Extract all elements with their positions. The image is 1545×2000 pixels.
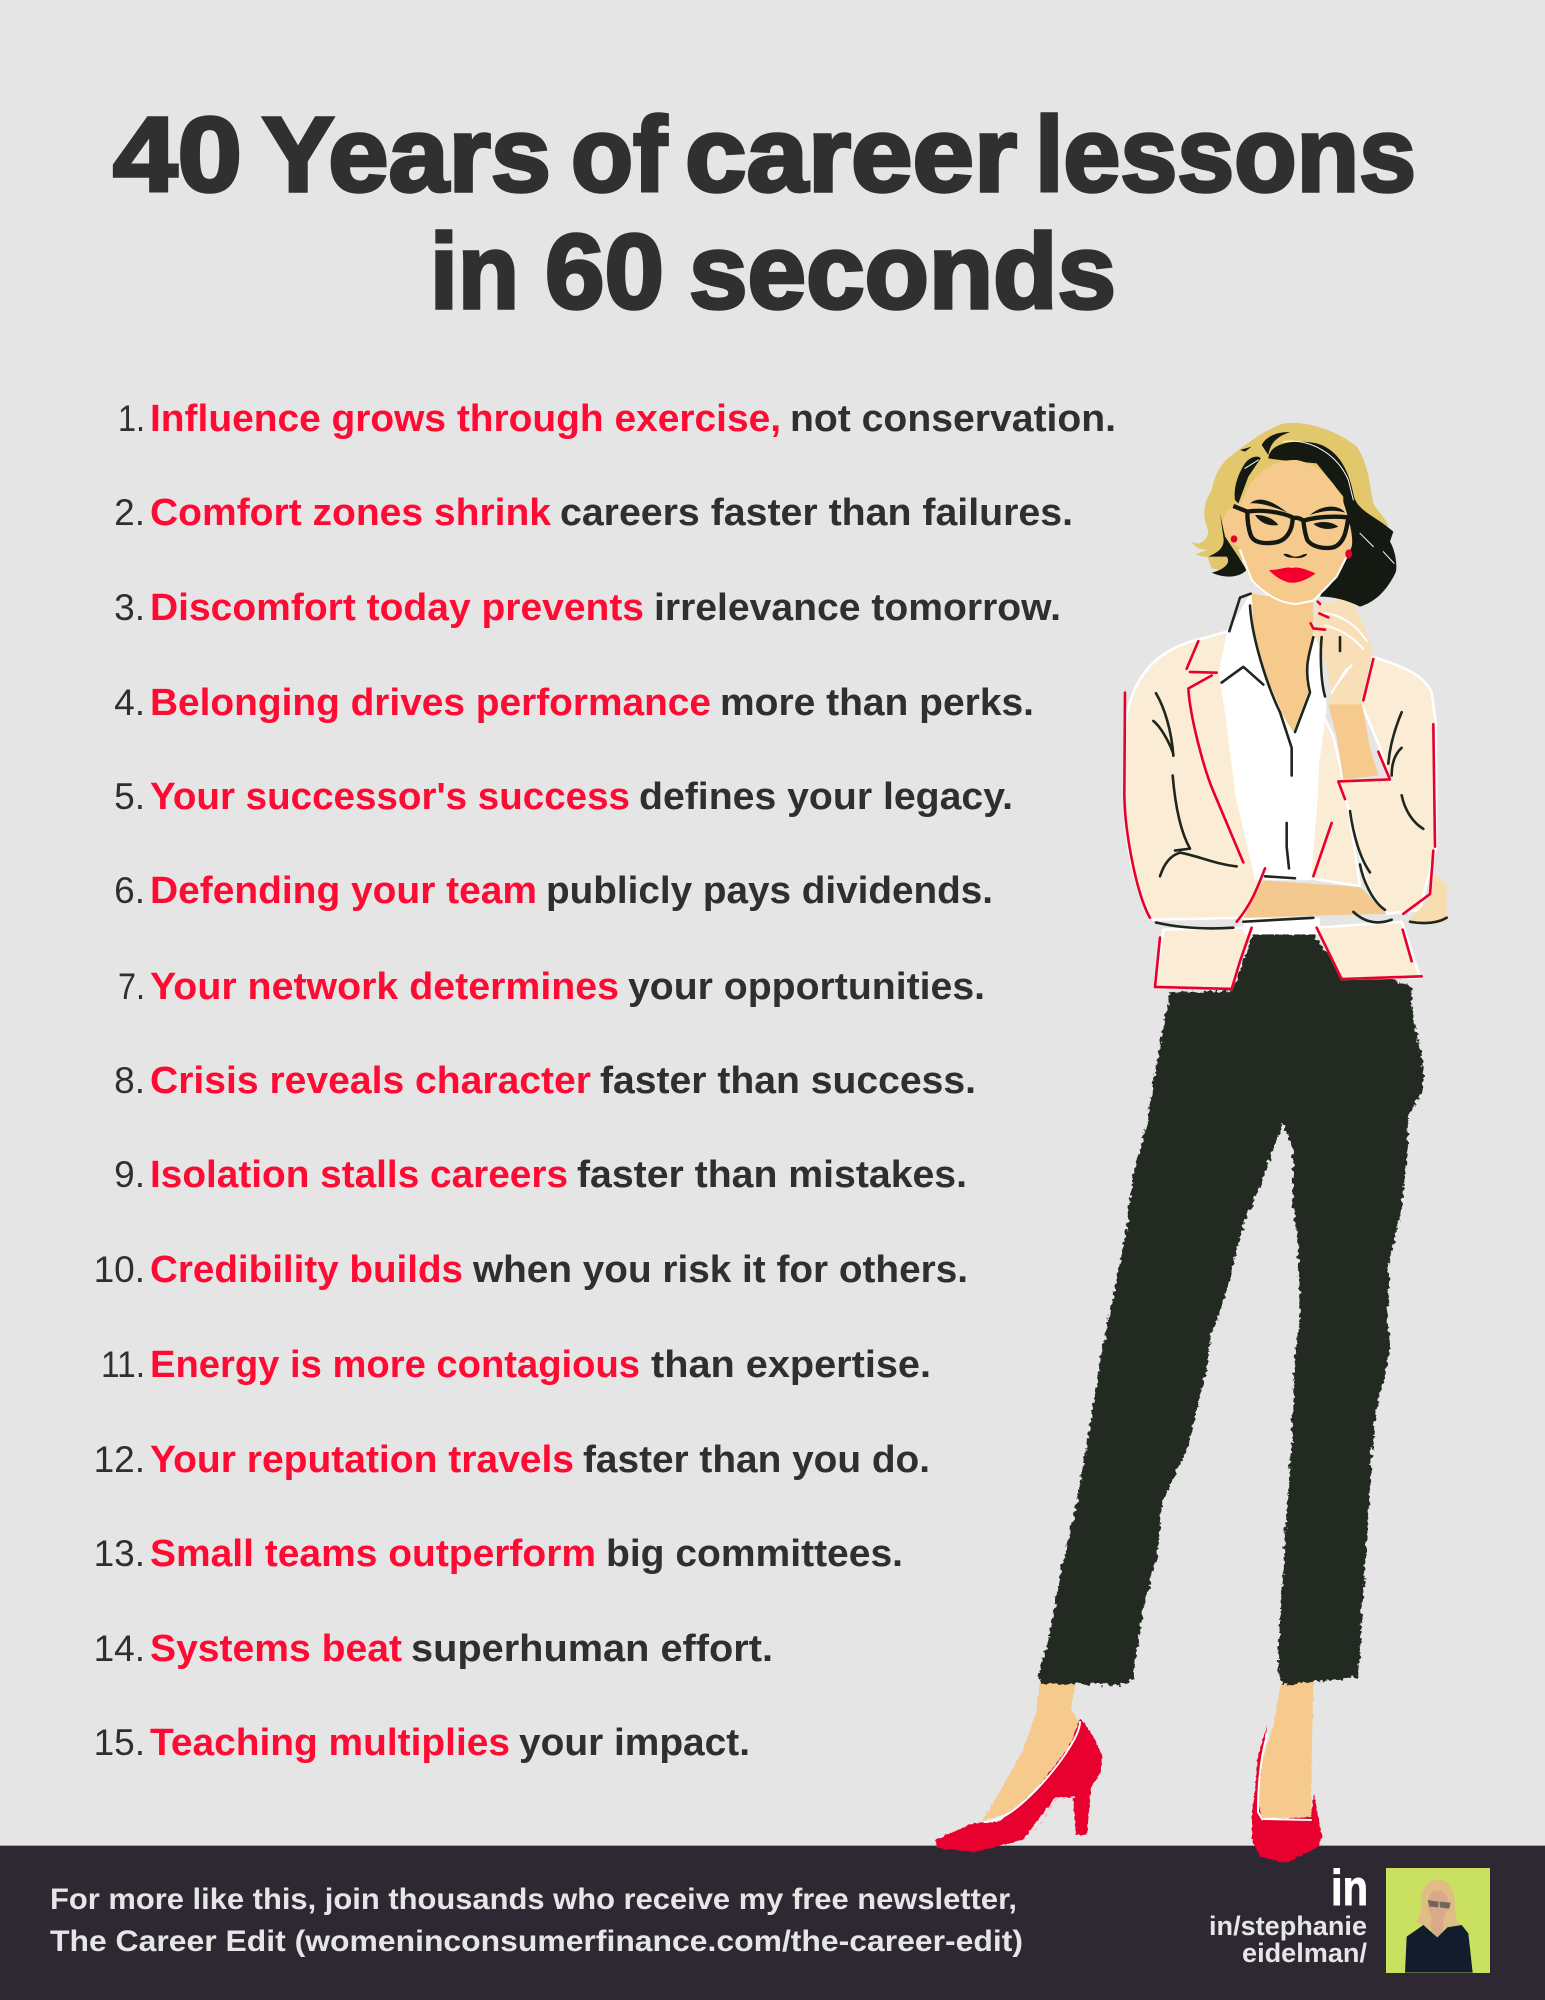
lesson 7: your opportunities.: [628, 966, 985, 1008]
lesson 10: when you risk it for others.: [472, 1249, 968, 1291]
lesson 4: Belonging drives performance: [150, 682, 711, 724]
footer band: [0, 1845, 1545, 2000]
lesson 9: [114, 1154, 967, 1196]
lesson 5: Your successor's success: [150, 776, 630, 818]
face outline: [1240, 550, 1347, 604]
LinkedIn handle: eidelman/: [1242, 1938, 1367, 1968]
lesson 11: [101, 1344, 931, 1386]
crossed forearm: [1243, 880, 1387, 918]
lesson 15: your impact.: [519, 1722, 750, 1764]
icon: LinkedIn "in" mark: in: [1331, 1860, 1368, 1916]
lesson 3: Discomfort today prevents: [150, 587, 644, 629]
lesson 8: [114, 1060, 976, 1102]
cream blazer: [1124, 631, 1436, 989]
title: career: [685, 96, 1017, 214]
title: of: [571, 96, 668, 214]
black trousers: [1038, 934, 1423, 1685]
lesson 6: 6.: [114, 870, 145, 911]
head with blonde and black hair, glasses, red lips: [1192, 423, 1396, 607]
lesson 13: 13.: [94, 1533, 145, 1574]
lesson 13: Small teams outperform: [150, 1533, 596, 1575]
footer newsletter text: For more like this, join thousands who receive my free newsletter,: [50, 1883, 1017, 1916]
title: lessons: [1035, 96, 1416, 214]
lesson 7: 7.: [118, 966, 145, 1007]
lesson 12: Your reputation travels: [150, 1439, 574, 1481]
lesson 4: more than perks.: [720, 682, 1034, 724]
lesson 12: [94, 1439, 930, 1481]
lesson 9: Isolation stalls careers: [150, 1154, 568, 1196]
lesson 2: Comfort zones shrink: [150, 492, 552, 534]
title: seconds: [689, 213, 1116, 331]
legs and feet: [982, 1680, 1314, 1821]
lesson 13: big committees.: [606, 1533, 903, 1575]
lesson 14: 14.: [94, 1628, 145, 1669]
lesson 10: [94, 1249, 968, 1291]
lesson 11: than expertise.: [651, 1344, 931, 1386]
eyebrows: [1250, 500, 1345, 515]
lesson 6: publicly pays dividends.: [546, 870, 993, 912]
neck skin: [1252, 594, 1313, 732]
lesson 9: faster than mistakes.: [577, 1154, 967, 1196]
nose: [1283, 554, 1307, 558]
far hand: [1408, 874, 1447, 922]
lesson 10: 10.: [94, 1249, 145, 1290]
lesson 10: Credibility builds: [150, 1249, 463, 1291]
red shoe, right: [1252, 1725, 1322, 1863]
lesson 1: Influence grows through exercise,: [150, 398, 781, 440]
lesson 14: [94, 1628, 773, 1670]
title: 40: [113, 96, 242, 214]
torso: jacket, shirt and arms: [1124, 583, 1447, 989]
lesson 4: [114, 682, 1034, 724]
footer newsletter text: [50, 1883, 1023, 1958]
lesson 2: [114, 492, 1073, 534]
lesson 11: Energy is more contagious: [150, 1344, 640, 1386]
lesson 5: [114, 776, 1013, 818]
raised forearm: [1328, 702, 1378, 779]
earrings: [1231, 535, 1352, 559]
lesson 9: 9.: [114, 1154, 145, 1195]
lesson 11: 11.: [101, 1344, 145, 1385]
illustration: businesswoman in glasses and red heels: [935, 423, 1447, 1863]
lesson 5: defines your legacy.: [639, 776, 1013, 818]
lesson 14: superhuman effort.: [411, 1628, 773, 1670]
blazer and shirt line work: [1124, 583, 1447, 989]
eyes: [1255, 515, 1338, 529]
lesson 3: 3.: [114, 587, 145, 628]
footer newsletter text: The Career Edit (womeninconsumerfinance.com/the-career-edit): [50, 1925, 1023, 1958]
red lips: [1269, 567, 1316, 583]
lesson 1: [118, 398, 1116, 440]
blonde hair: [1192, 423, 1388, 570]
lesson 3: [114, 587, 1061, 629]
title: 60: [545, 213, 664, 331]
white shirt: [1220, 594, 1327, 880]
lesson 6: [114, 870, 993, 912]
lesson 1: not conservation.: [790, 398, 1116, 440]
author headshot on lime background: [1386, 1868, 1490, 1973]
lesson 2: 2.: [114, 492, 145, 533]
lesson 3: irrelevance tomorrow.: [654, 587, 1061, 629]
LinkedIn handle: [1209, 1911, 1367, 1968]
red shoe, left: [935, 1719, 1102, 1852]
lesson 8: faster than success.: [600, 1060, 976, 1102]
hair highlights: [1245, 441, 1394, 563]
title: [113, 96, 1416, 331]
lesson 12: faster than you do.: [583, 1439, 930, 1481]
lesson 6: Defending your team: [150, 870, 537, 912]
lesson 7: Your network determines: [150, 966, 619, 1008]
title: in: [430, 213, 519, 331]
eyeglasses: [1233, 506, 1348, 548]
title: Years: [262, 96, 551, 214]
lesson 15: [94, 1722, 750, 1764]
black hair: [1268, 442, 1396, 607]
lesson 8: Crisis reveals character: [150, 1060, 591, 1102]
lesson 15: 15.: [94, 1722, 145, 1763]
lesson 13: [94, 1533, 903, 1575]
raised hand: [1313, 584, 1372, 704]
lesson 4: 4.: [114, 682, 145, 723]
lesson 2: careers faster than failures.: [560, 492, 1073, 534]
lesson 12: 12.: [94, 1439, 145, 1480]
lesson 5: 5.: [114, 776, 145, 817]
face: [1223, 460, 1352, 603]
lesson 15: Teaching multiplies: [150, 1722, 510, 1764]
lesson 1: 1.: [118, 398, 145, 439]
lesson 8: 8.: [114, 1060, 145, 1101]
list of 15 career lessons: [94, 398, 1116, 1764]
LinkedIn handle: in/stephanie: [1209, 1911, 1367, 1941]
lesson 14: Systems beat: [150, 1628, 402, 1670]
lesson 7: [118, 966, 985, 1008]
